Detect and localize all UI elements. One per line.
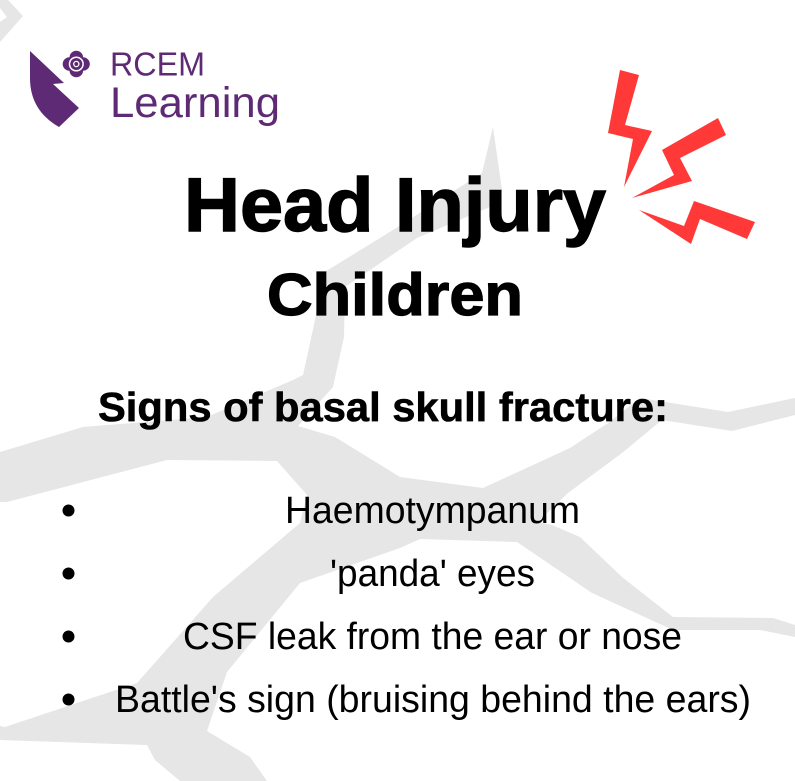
logo text: Learning: Learning	[110, 79, 280, 127]
list: signs of basal skull fracture	[62, 490, 751, 721]
title: Head Injury: Head Injury	[184, 163, 606, 248]
logo: RCEM Learning	[30, 46, 280, 127]
list item: Haemotympanum: Haemotympanum	[285, 490, 580, 532]
bullet 1	[62, 504, 74, 516]
bullet 3	[62, 630, 74, 642]
bullet 4	[62, 694, 74, 706]
logo text: RCEM: RCEM	[110, 46, 205, 82]
heading: Signs of basal skull fracture: Signs of basal skull fracture:	[98, 384, 668, 430]
list item: Battle's sign: Battle's sign (bruising behind the ears)	[115, 679, 751, 721]
icon: purple shield	[30, 51, 79, 127]
subtitle: Children: Children	[267, 262, 523, 328]
list item: panda eyes: 'panda' eyes	[330, 553, 535, 595]
icon: red impact lightning bolts	[608, 70, 755, 244]
bullet 2	[62, 568, 74, 580]
list item: CSF leak: CSF leak from the ear or nose	[183, 616, 682, 658]
icon: flower emblem	[63, 51, 90, 77]
